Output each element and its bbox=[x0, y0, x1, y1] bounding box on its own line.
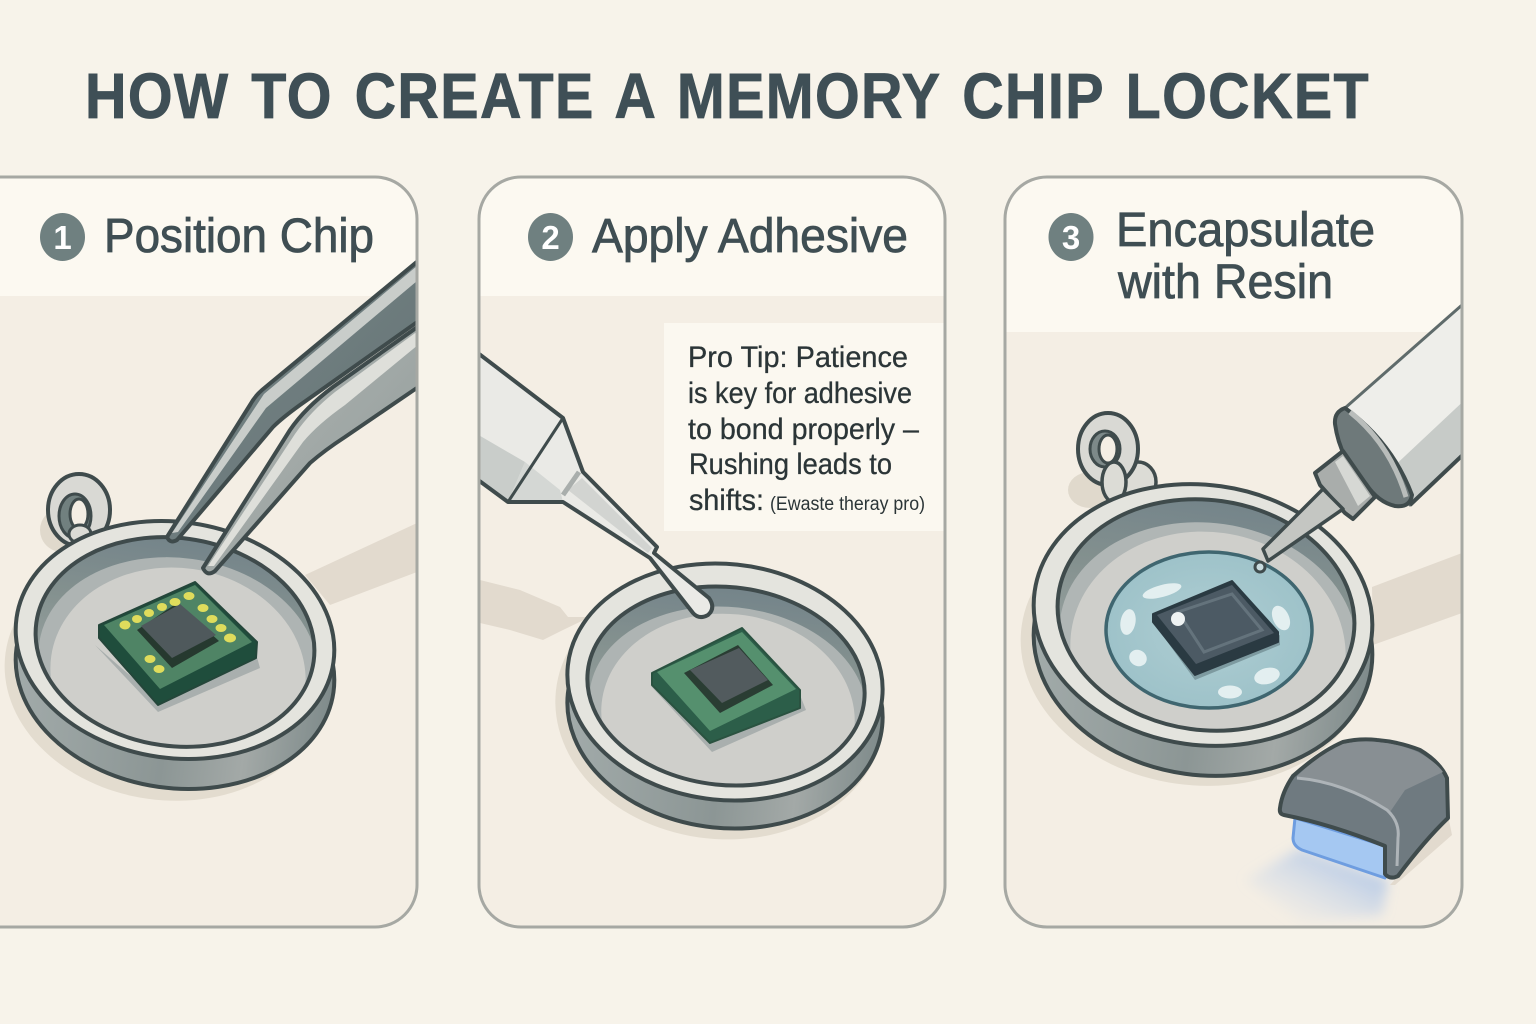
locket shadow bbox=[1020, 592, 1344, 786]
cast shadow of syringe bbox=[1372, 553, 1462, 645]
step number 1 bbox=[40, 213, 85, 261]
callout: pro tip: is key for adhesive bbox=[688, 377, 912, 410]
callout: pro tip: (Ewaste theray pro) bbox=[770, 494, 925, 515]
step number 1: 1 bbox=[53, 219, 72, 256]
heading: encapsulate with resin: with Resin bbox=[1117, 256, 1333, 309]
panel: step 2 apply adhesive bbox=[470, 177, 949, 927]
heading: encapsulate with resin bbox=[1116, 204, 1375, 309]
icon: resin syringe bbox=[1255, 298, 1470, 572]
panel: step 1 position chip bbox=[0, 177, 430, 927]
callout: pro tip: to bond properly – bbox=[688, 413, 919, 446]
locket shadow bbox=[4, 625, 282, 801]
callout: pro tip: Pro Tip: Patience bbox=[688, 341, 908, 374]
callout: pro tip bbox=[664, 323, 949, 531]
icon: encapsulated chip bbox=[1153, 581, 1280, 680]
cast shadow of tweezers bbox=[305, 523, 417, 605]
icon: adhesive applicator bbox=[470, 347, 713, 617]
cast shadow of applicator bbox=[480, 580, 590, 640]
icon: locket ring bbox=[1078, 413, 1156, 502]
callout: pro tip: Rushing leads to bbox=[689, 448, 892, 481]
icon: empty locket base bbox=[14, 519, 336, 791]
step number 2 bbox=[528, 213, 573, 261]
heading: position chip: Position Chip bbox=[104, 210, 374, 263]
icon: resin pool bbox=[1106, 552, 1312, 708]
title: HOW TO CREATE A MEMORY CHIP LOCKET bbox=[85, 60, 1370, 132]
icon: locket base bbox=[1032, 482, 1374, 778]
icon: UV lamp bbox=[1245, 739, 1452, 922]
icon: tweezers bbox=[167, 251, 430, 573]
step number 3: 3 bbox=[1062, 219, 1080, 256]
callout: pro tip: shifts: bbox=[689, 484, 764, 517]
icon: green chip bbox=[650, 628, 806, 752]
icon: locket ring bbox=[48, 474, 110, 546]
icon: locket base with chip bbox=[565, 562, 885, 830]
step number 3 bbox=[1048, 213, 1094, 261]
heading: apply adhesive: Apply Adhesive bbox=[592, 210, 908, 263]
panel: step 3 encapsulate with resin bbox=[1003, 177, 1470, 927]
icon: green chip with gold pads bbox=[95, 582, 260, 712]
heading: encapsulate with resin: Encapsulate bbox=[1116, 204, 1375, 257]
locket shadow bbox=[556, 651, 884, 840]
step number 2: 2 bbox=[541, 219, 560, 256]
